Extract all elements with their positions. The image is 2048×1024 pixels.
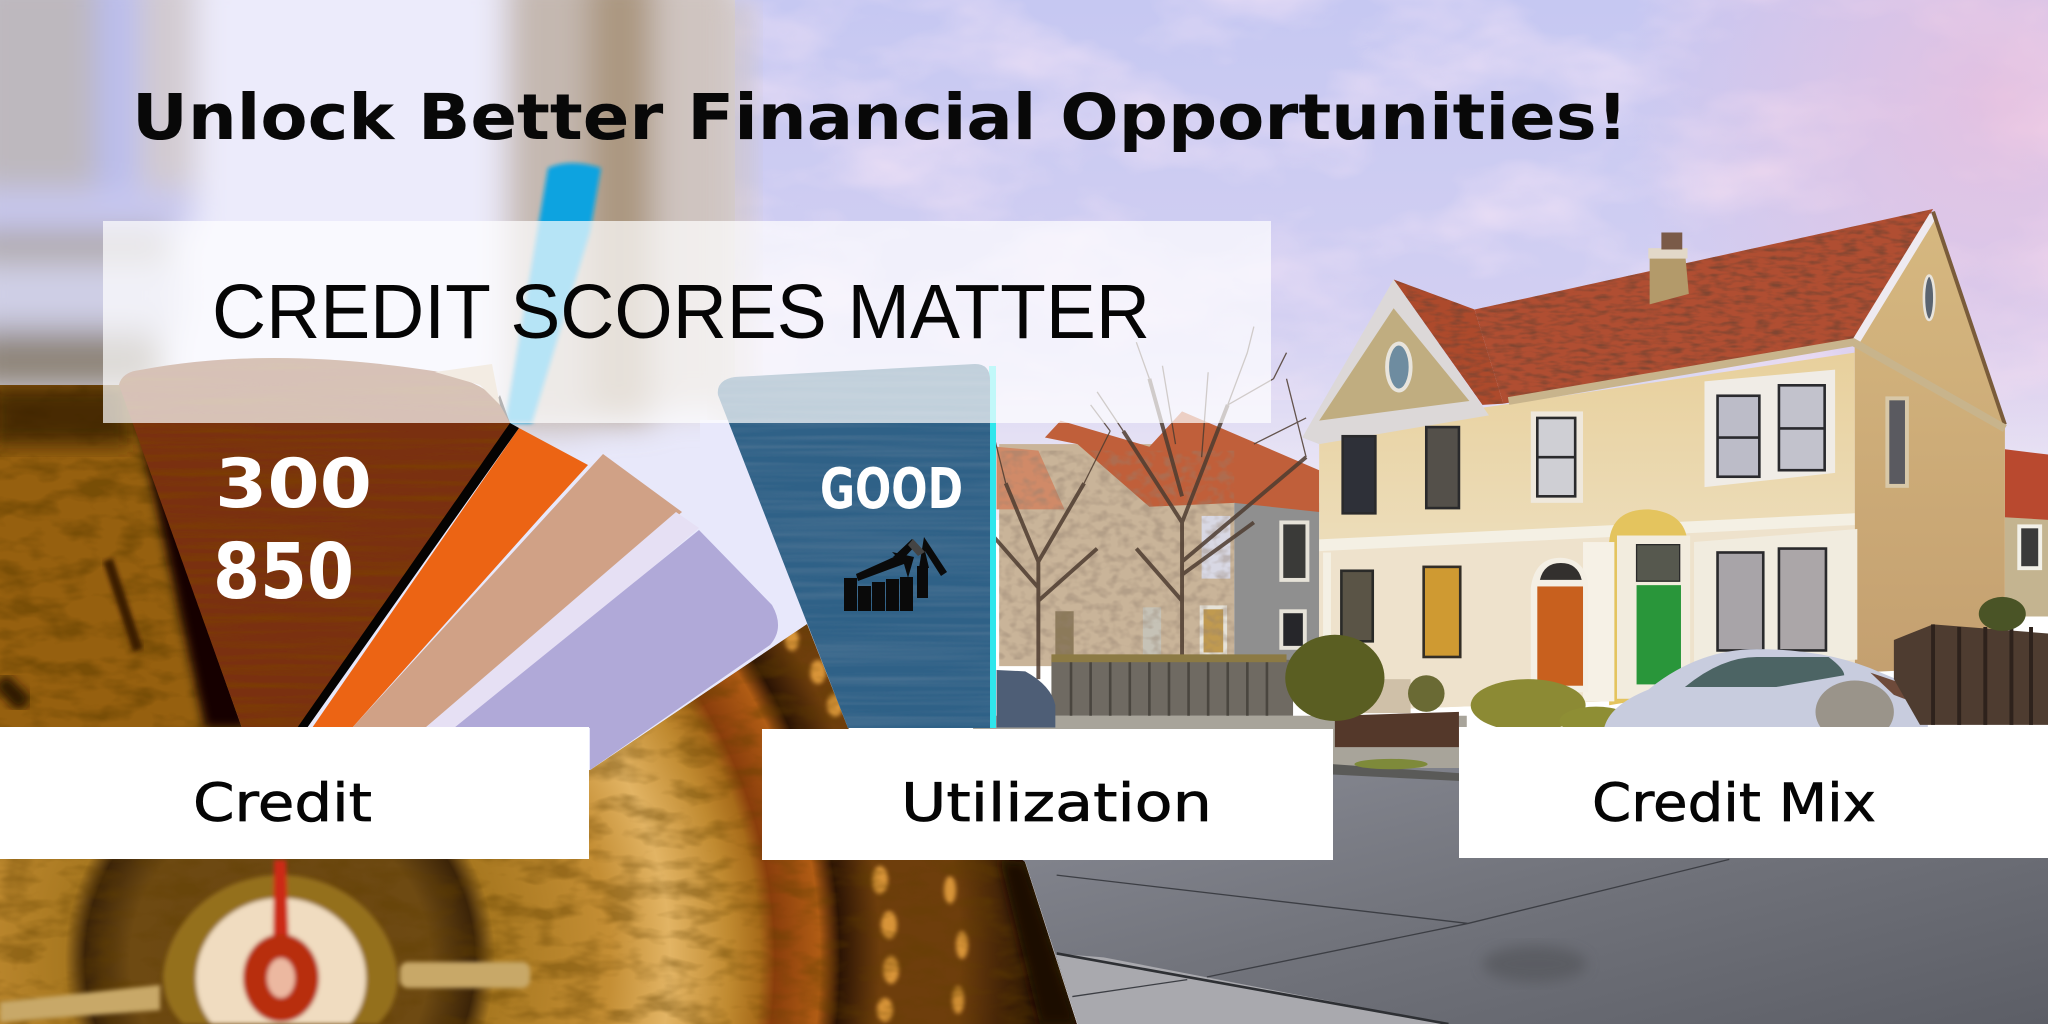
roof <box>1475 209 1933 404</box>
gauge dial <box>0 860 530 1024</box>
credit score wedge <box>119 358 519 728</box>
main house <box>1302 209 2005 713</box>
banner: credit scores matter <box>103 221 1271 423</box>
label: credit mix <box>1459 727 2048 858</box>
house front wall <box>1319 353 1855 712</box>
rear wooden fence <box>1894 597 2048 725</box>
background: blue straw <box>505 163 601 423</box>
gauge left section <box>0 385 250 730</box>
banner heading: CREDIT SCORES MATTER <box>212 269 1150 355</box>
label: credit <box>0 727 589 859</box>
label: credit mix: Credit Mix <box>1592 773 1876 834</box>
neighbouring houses <box>997 411 1319 666</box>
orange door <box>1531 558 1588 692</box>
wooden fence <box>1051 654 1293 716</box>
background: road surface <box>973 716 2048 1024</box>
label: credit: Credit <box>193 773 372 834</box>
score high value: 850 <box>213 528 354 617</box>
background: antique gauge <box>0 385 1100 1024</box>
cyan panel edge <box>989 366 996 728</box>
front gable <box>1302 280 1489 444</box>
white parked car <box>1604 649 1928 743</box>
blue parked car <box>997 670 1055 728</box>
background: sky <box>700 0 2048 660</box>
upper windows <box>1343 436 1375 513</box>
bare trees <box>993 327 1306 679</box>
house side wall <box>1855 216 2005 673</box>
icon: rising bar chart <box>844 537 947 611</box>
entry arch <box>1609 509 1688 705</box>
hedge bushes <box>1285 635 1633 735</box>
title: Unlock Better Financial Opportunities! <box>132 81 1628 154</box>
chimney <box>1650 251 1689 304</box>
label: utilization: Utilization <box>901 773 1212 834</box>
lower windows <box>1341 571 1373 641</box>
label: utilization <box>762 729 1333 860</box>
gauge rim studs <box>785 629 968 1022</box>
cornice band <box>1319 513 1855 551</box>
house scene <box>993 209 2048 747</box>
green door <box>1637 545 1681 684</box>
score low value: 300 <box>215 445 372 524</box>
right gable trim <box>1855 216 1933 344</box>
mulch bed <box>1335 712 1459 747</box>
rating label: GOOD <box>820 457 963 522</box>
small house far right <box>2005 449 2048 616</box>
background: blurred window interior <box>0 0 800 760</box>
utilization panel <box>718 364 996 728</box>
paper fan: orange, tan and lavender sheets <box>312 428 807 770</box>
